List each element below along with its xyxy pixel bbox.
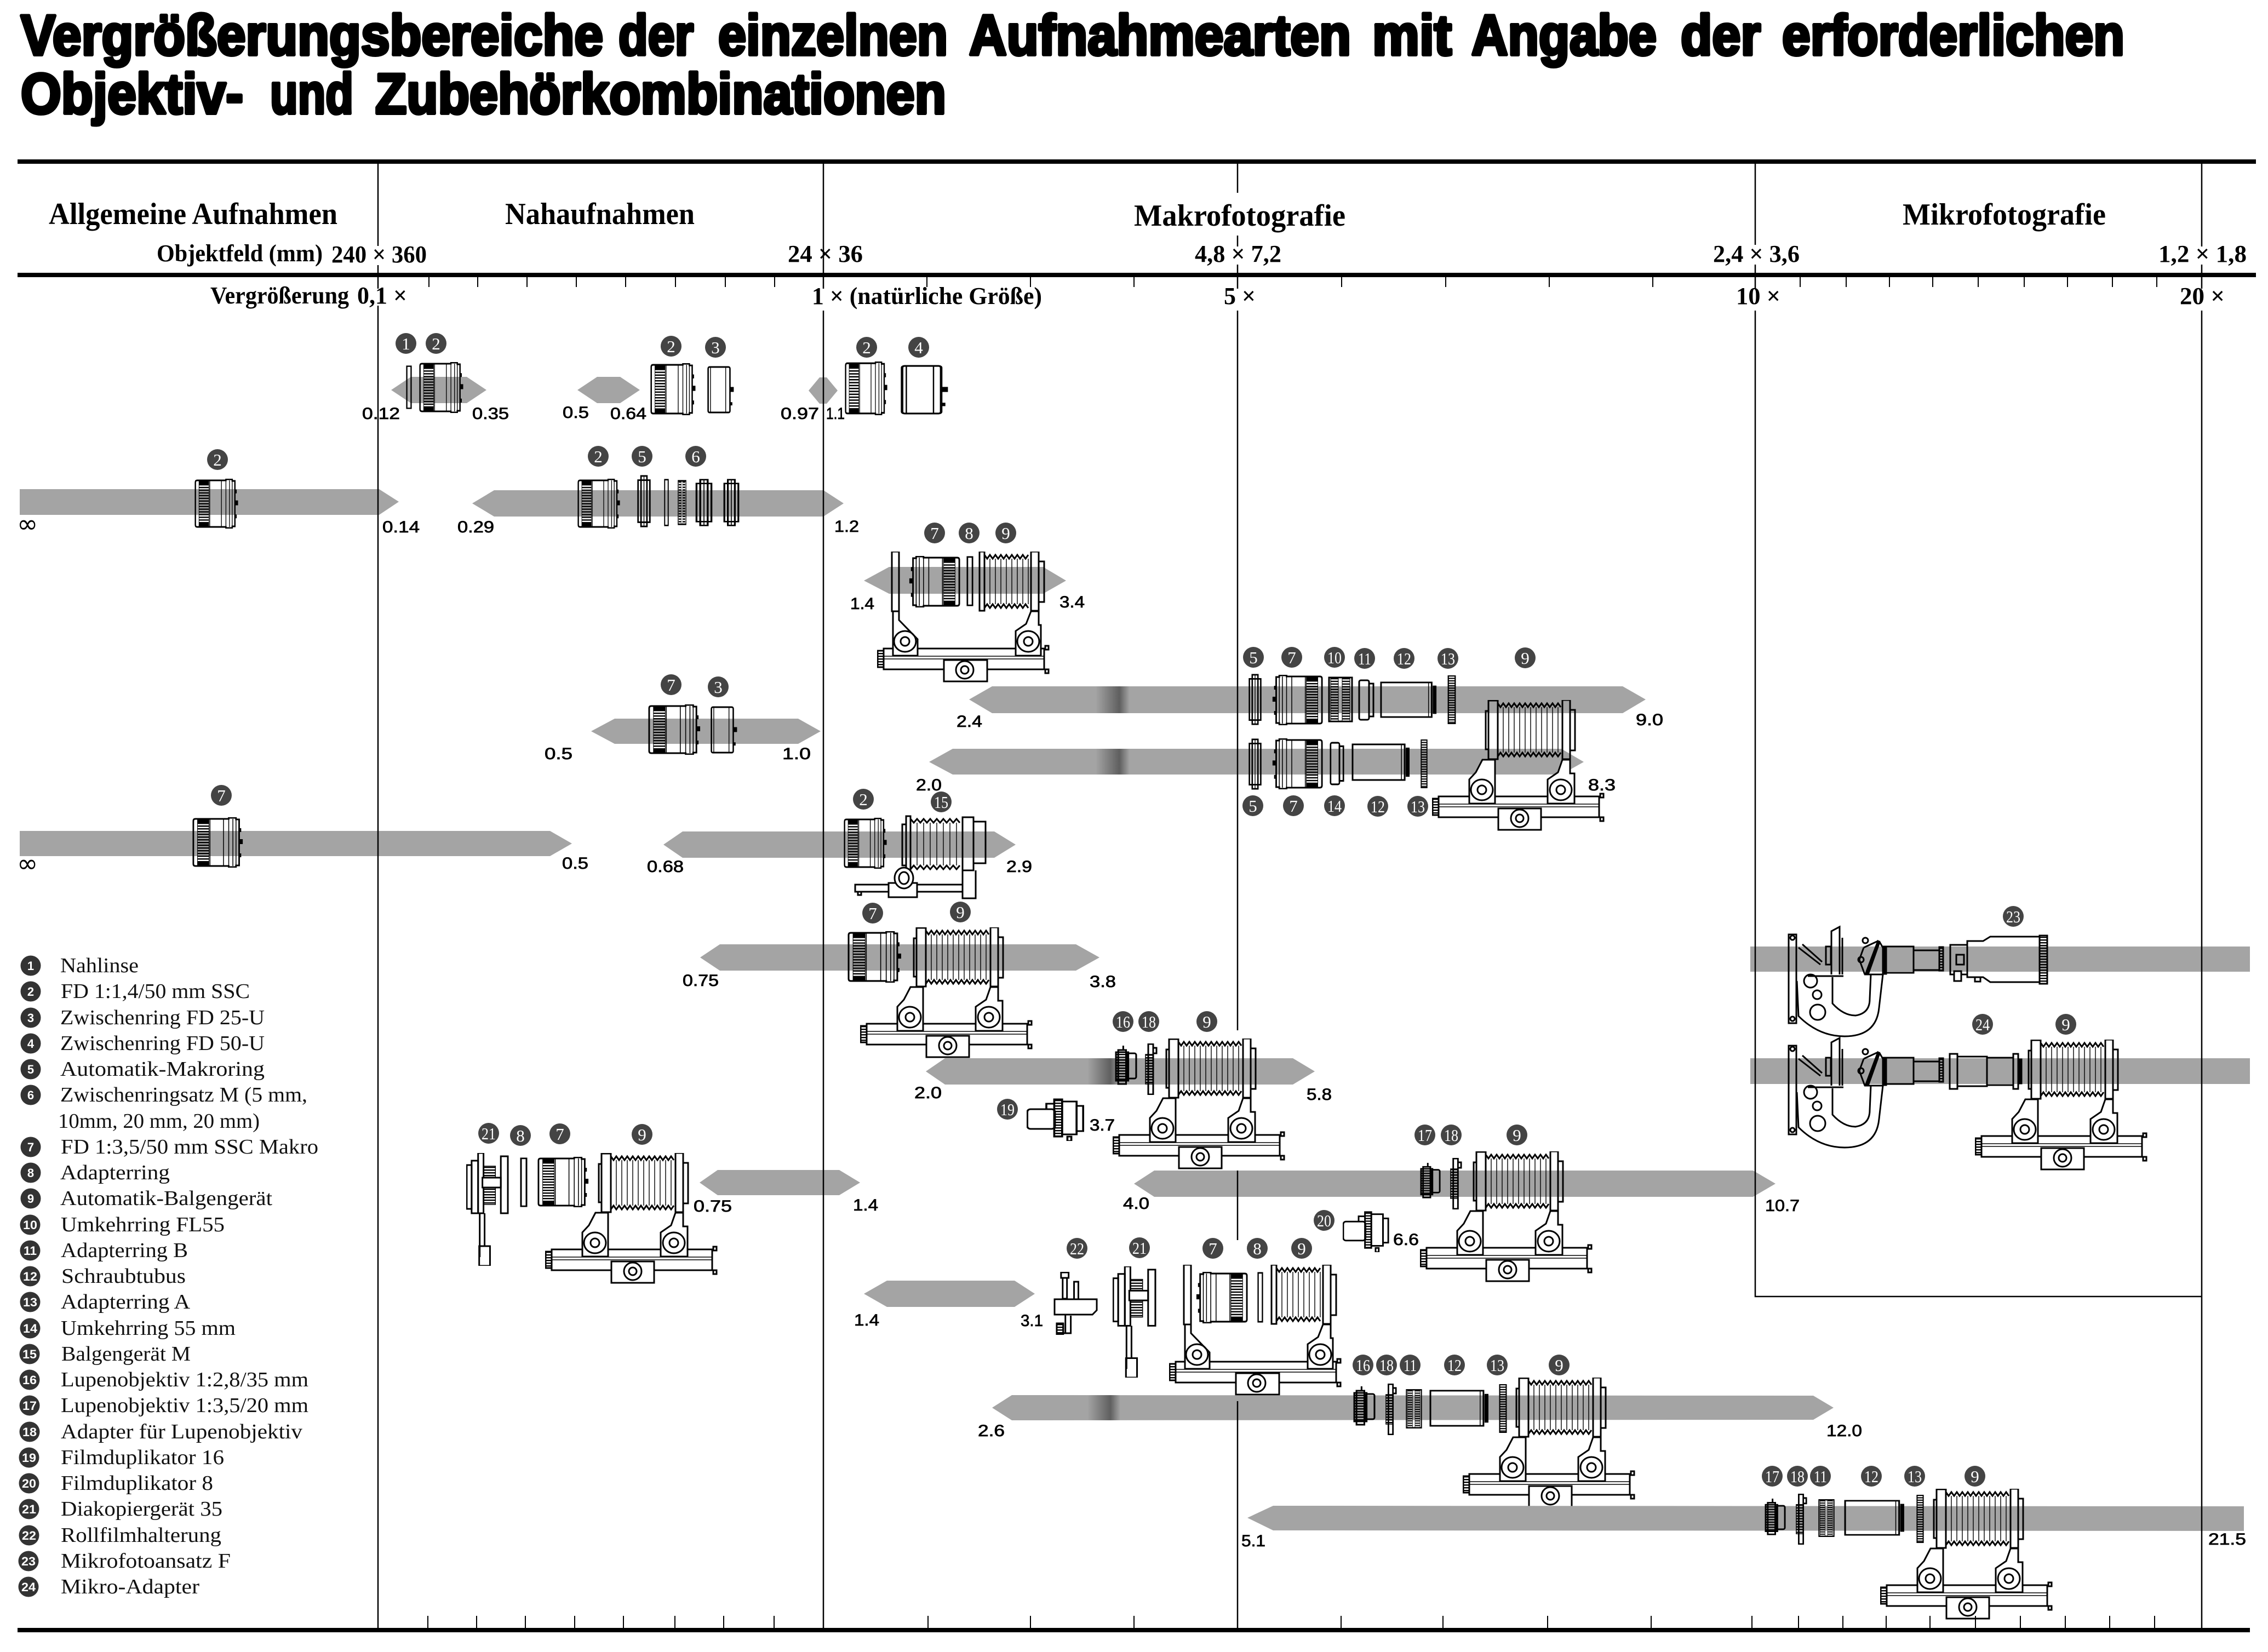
title: erforderlichen (1782, 4, 2124, 67)
range 2.6–12.0: magnifying lens, tube and bellows: 11 (1404, 1356, 1417, 1375)
range 5.1–21.5: magnifying lens, tube and bellows: 9 (1971, 1467, 1979, 1486)
range 2.0–8.3: reversed macro lens, reverse ring, tube and bellows (916, 700, 1616, 830)
range 5.1–21.5: magnifying lens, tube and bellows: 17 (1765, 1467, 1779, 1486)
legend: Lupenobjektiv 1:2,8/35 mm (61, 1368, 308, 1391)
range 0.12–0.35: close-up lens with FD 50: 0.12 (362, 405, 400, 423)
legend: FD 1:3,5/50 mm SSC Makro (61, 1135, 318, 1158)
legend: 14 (23, 1322, 38, 1335)
range 2.0–8.3: reversed macro lens, reverse ring, tube and bellows: 5 (1248, 796, 1257, 816)
range 2.0–8.3: reversed macro lens, reverse ring, tube and bellows: 2.0 (916, 776, 942, 794)
range 1.4–3.4: reversed macro lens on bellows: 3.4 (1059, 593, 1085, 611)
legend: 21 (22, 1502, 36, 1516)
legend: 20 (22, 1477, 36, 1490)
range 1.4–3.4: reversed macro lens on bellows: 9 (1001, 524, 1010, 543)
film duplicator 16: 19 (1000, 1100, 1015, 1119)
range 2.4–9.0: reversed macro lens, tube and bellows: 11 (1358, 649, 1371, 668)
legend: 5 (27, 1063, 34, 1076)
range 1.4–3.1: roll film holder, slide copier, macro lens, bellows: 1.4 (854, 1311, 879, 1329)
magnification 10x: 10 × (1736, 283, 1780, 309)
legend: 4 (27, 1037, 35, 1051)
legend: Rollfilmhalterung (61, 1524, 221, 1547)
title: der (618, 4, 694, 67)
range 4.0–10.7: magnifying lens on bellows (1123, 1125, 1800, 1281)
film duplicator 8 (1314, 1210, 1419, 1252)
range 2.0–5.8: magnifying lens on bellows: 9 (1202, 1012, 1211, 1031)
object field 4,8 x 7,2: 4,8 × 7,2 (1195, 240, 1281, 267)
range 2.4–9.0: reversed macro lens, tube and bellows: 9 (1521, 649, 1530, 668)
range 0.29–1.2: FD 50 with macro ring and extension set: 0.29 (457, 518, 494, 536)
axis header: section headings and scale labels (49, 197, 2247, 309)
microscope row with Mikro-Adapter and bellows: 9 (2061, 1015, 2070, 1034)
range 2.4–9.0: reversed macro lens, tube and bellows: 13 (1441, 649, 1455, 668)
object field 240 x 360: 240 × 360 (331, 241, 427, 268)
range 1.4–3.4: reversed macro lens on bellows: 1.4 (850, 595, 874, 613)
range infinity–0.5: macro lens (17, 785, 588, 878)
range infinity–0.14: FD 50 (17, 449, 420, 538)
range 1.4–3.1: roll film holder, slide copier, macro lens, bellows: 8 (1253, 1239, 1262, 1258)
range 2.6–12.0: magnifying lens, tube and bellows: 13 (1490, 1356, 1504, 1375)
range 0.12–0.35: close-up lens with FD 50: 1 (402, 334, 410, 353)
title: Zubehörkombinationen (375, 62, 946, 126)
range 0.97–1.1: FD 50 with extension FD 50-U: 2 (862, 338, 871, 357)
legend: 6 (27, 1088, 34, 1102)
range 2.6–12.0: magnifying lens, tube and bellows (978, 1355, 1862, 1507)
range 0.75–3.8: macro lens on bellows: 0.75 (683, 972, 719, 990)
legend: FD 1:1,4/50 mm SSC (61, 980, 250, 1003)
heading: Nahaufnahmen: Nahaufnahmen (505, 197, 695, 231)
range infinity–0.14: FD 50: 0.14 (382, 518, 420, 536)
range 1.4–3.4: reversed macro lens on bellows (850, 523, 1085, 681)
range 2.4–9.0: reversed macro lens, tube and bellows: 9.0 (1636, 711, 1663, 729)
label: Vergrößerung: Vergrößerung (210, 282, 349, 309)
legend: Filmduplikator 8 (61, 1472, 213, 1495)
range 0.75–1.4: slide copier, macro lens, bellows: 9 (638, 1125, 646, 1144)
range 0.75–1.4: slide copier, macro lens, bellows: 7 (555, 1125, 564, 1144)
range 0.68–2.9: FD 50 on bellows M (647, 789, 1032, 898)
microscope row with Mikro-Adapter and bellows (1750, 1014, 2250, 1169)
legend: Adapter für Lupenobjektiv (61, 1420, 302, 1443)
range 1.4–3.1: roll film holder, slide copier, macro lens, bellows: 3.1 (1021, 1312, 1043, 1330)
label: Objektfeld: Objektfeld (mm) (157, 240, 323, 267)
heading: Allgemeine Aufnahmen: Allgemeine Aufnahmen (49, 197, 337, 231)
legend: 19 (22, 1451, 36, 1465)
range 5.1–21.5: magnifying lens, tube and bellows (1241, 1466, 2246, 1619)
range 2.0–8.3: reversed macro lens, reverse ring, tube and bellows: 8.3 (1588, 776, 1616, 794)
object field 1,2 x 1,8: 1,2 × 1,8 (2158, 240, 2247, 267)
range 2.4–9.0: reversed macro lens, tube and bellows: 7 (1287, 648, 1296, 667)
range 0.97–1.1: FD 50 with extension FD 50-U (781, 337, 948, 423)
legend: Automatik-Makroring (60, 1058, 265, 1081)
range 2.0–8.3: reversed macro lens, reverse ring, tube and bellows: 14 (1327, 796, 1342, 816)
film duplicator 8: 6.6 (1393, 1231, 1419, 1249)
range 2.6–12.0: magnifying lens, tube and bellows: 16 (1356, 1356, 1370, 1375)
microscope row with Mikro-Adapter and bellows: 24 (1975, 1015, 1990, 1034)
range 2.6–12.0: magnifying lens, tube and bellows: 9 (1555, 1356, 1563, 1375)
legend (19, 954, 318, 1598)
range 0.29–1.2: FD 50 with macro ring and extension set: 1.2 (834, 518, 859, 536)
range infinity–0.5: macro lens: ∞ (17, 848, 38, 878)
range 2.0–5.8: magnifying lens on bellows: 2.0 (914, 1084, 942, 1102)
microscope row with Mikrofotoansatz F: 23 (2006, 907, 2020, 926)
legend: Nahlinse (60, 954, 139, 977)
legend: 8 (27, 1166, 34, 1180)
legend: 12 (23, 1270, 37, 1283)
range 4.0–10.7: magnifying lens on bellows: 18 (1444, 1126, 1458, 1145)
range 1.4–3.1: roll film holder, slide copier, macro lens, bellows: 21 (1132, 1238, 1147, 1258)
legend: 16 (22, 1373, 37, 1387)
range 0.75–3.8: macro lens on bellows: 7 (868, 904, 877, 923)
range 0.75–1.4: slide copier, macro lens, bellows (467, 1123, 878, 1283)
range 0.75–1.4: slide copier, macro lens, bellows: 0.75 (694, 1197, 732, 1215)
range 0.75–3.8: macro lens on bellows (683, 902, 1116, 1057)
legend: 11 (24, 1244, 37, 1258)
range 0.97–1.1: FD 50 with extension FD 50-U: 1.1 (826, 405, 845, 423)
legend: 10mm, 20 mm, 20 mm) (58, 1110, 260, 1133)
film duplicator 8: 20 (1317, 1211, 1331, 1230)
range 5.1–21.5: magnifying lens, tube and bellows: 13 (1908, 1467, 1922, 1486)
title: und (270, 62, 353, 126)
legend: 2 (27, 985, 34, 999)
range 2.0–5.8: magnifying lens on bellows: 5.8 (1307, 1086, 1332, 1104)
title: Aufnahmearten (969, 4, 1351, 67)
range 2.4–9.0: reversed macro lens, tube and bellows: 10 (1327, 648, 1342, 667)
range 2.0–5.8: magnifying lens on bellows (914, 1011, 1332, 1168)
range 0.5–0.64: FD 50 with extension FD 25-U (563, 336, 734, 423)
range 5.1–21.5: magnifying lens, tube and bellows: 12 (1864, 1467, 1878, 1486)
range 1.4–3.1: roll film holder, slide copier, macro lens, bellows: 22 (1070, 1239, 1084, 1258)
range 0.5–0.64: FD 50 with extension FD 25-U: 0.5 (563, 404, 589, 422)
range 0.5–1.0: macro lens with extension ring: 3 (714, 678, 723, 697)
range 0.5–0.64: FD 50 with extension FD 25-U: 2 (667, 337, 675, 356)
range 0.5–1.0: macro lens with extension ring: 7 (667, 675, 675, 695)
range 0.75–1.4: slide copier, macro lens, bellows: 8 (516, 1126, 525, 1145)
range 5.1–21.5: magnifying lens, tube and bellows: 21.5 (2208, 1530, 2246, 1548)
legend: 18 (22, 1425, 37, 1439)
range 0.75–1.4: slide copier, macro lens, bellows: 1.4 (853, 1196, 878, 1214)
legend: Adapterring B (61, 1239, 188, 1262)
range 5.1–21.5: magnifying lens, tube and bellows: 18 (1790, 1467, 1805, 1486)
legend: Zwischenring FD 50-U (60, 1032, 265, 1055)
range 2.4–9.0: reversed macro lens, tube and bellows: 5 (1249, 648, 1258, 667)
range 1.4–3.4: reversed macro lens on bellows: 7 (930, 524, 939, 543)
legend: Zwischenringsatz M (5 mm, (60, 1083, 307, 1106)
range 0.12–0.35: close-up lens with FD 50: 2 (432, 334, 440, 353)
legend: 9 (27, 1192, 34, 1206)
microscope row with Mikrofotoansatz F (1750, 906, 2250, 1036)
range 0.5–0.64: FD 50 with extension FD 25-U: 0.64 (610, 405, 646, 423)
range 0.68–2.9: FD 50 on bellows M: 2 (859, 790, 868, 809)
range 0.75–3.8: macro lens on bellows: 3.8 (1090, 973, 1116, 991)
legend: Adapterring (60, 1161, 170, 1184)
magnification 5x: 5 × (1224, 283, 1256, 309)
range 2.6–12.0: magnifying lens, tube and bellows: 18 (1379, 1356, 1394, 1375)
range infinity–0.14: FD 50: 2 (213, 450, 222, 469)
legend: Zwischenring FD 25-U (60, 1006, 265, 1029)
legend: 3 (27, 1011, 34, 1025)
range 0.5–1.0: macro lens with extension ring: 0.5 (545, 745, 572, 763)
range 4.0–10.7: magnifying lens on bellows: 9 (1513, 1126, 1521, 1145)
range 0.29–1.2: FD 50 with macro ring and extension set (457, 446, 859, 536)
legend: Diakopiergerät 35 (61, 1498, 222, 1521)
legend: 1 (27, 959, 34, 973)
legend: 23 (21, 1555, 36, 1568)
range 0.75–1.4: slide copier, macro lens, bellows: 21 (482, 1124, 496, 1143)
range 2.6–12.0: magnifying lens, tube and bellows: 12.0 (1826, 1422, 1862, 1440)
range 4.0–10.7: magnifying lens on bellows: 17 (1418, 1126, 1432, 1145)
range 1.4–3.1: roll film holder, slide copier, macro lens, bellows: 9 (1297, 1239, 1306, 1258)
range 2.0–5.8: magnifying lens on bellows: 16 (1116, 1012, 1130, 1031)
range infinity–0.5: macro lens: 7 (217, 786, 226, 805)
range 1.4–3.1: roll film holder, slide copier, macro lens, bellows (854, 1237, 1341, 1395)
legend: 10 (23, 1218, 37, 1232)
range 0.68–2.9: FD 50 on bellows M: 15 (934, 793, 948, 812)
range infinity–0.5: macro lens: 0.5 (562, 854, 588, 873)
legend: 15 (22, 1347, 37, 1361)
range 0.5–1.0: macro lens with extension ring (545, 674, 821, 763)
range 0.29–1.2: FD 50 with macro ring and extension set: 5 (638, 447, 646, 466)
object field 2,4 x 3,6: 2,4 × 3,6 (1713, 240, 1800, 267)
legend: Schraubtubus (61, 1265, 186, 1288)
heading: Makrofotografie: Makrofotografie (1134, 199, 1345, 233)
legend: Filmduplikator 16 (61, 1446, 224, 1469)
range 2.0–8.3: reversed macro lens, reverse ring, tube and bellows: 12 (1371, 797, 1385, 816)
range 0.29–1.2: FD 50 with macro ring and extension set: 2 (594, 447, 603, 466)
range 0.97–1.1: FD 50 with extension FD 50-U: 4 (914, 338, 923, 357)
legend: 13 (23, 1295, 37, 1309)
range 2.6–12.0: magnifying lens, tube and bellows: 12 (1447, 1356, 1462, 1375)
range 0.12–0.35: close-up lens with FD 50 (362, 333, 509, 423)
range 5.1–21.5: magnifying lens, tube and bellows: 5.1 (1241, 1532, 1265, 1550)
title: einzelnen (718, 4, 948, 67)
range 2.6–12.0: magnifying lens, tube and bellows: 2.6 (978, 1422, 1005, 1440)
legend: 22 (22, 1529, 36, 1542)
range 2.4–9.0: reversed macro lens, tube and bellows: 12 (1397, 649, 1411, 668)
title: der (1681, 4, 1761, 67)
range 0.29–1.2: FD 50 with macro ring and extension set: 6 (691, 447, 700, 466)
film duplicator 16: 3.7 (1090, 1116, 1115, 1134)
magnification 1x: 1 × (natürliche Größe) (812, 283, 1042, 309)
title (21, 4, 2124, 126)
heading: Mikrofotografie: Mikrofotografie (1903, 198, 2106, 232)
range 4.0–10.7: magnifying lens on bellows: 10.7 (1765, 1197, 1800, 1215)
range 5.1–21.5: magnifying lens, tube and bellows: 11 (1814, 1467, 1827, 1486)
range infinity–0.14: FD 50: ∞ (17, 509, 38, 538)
title: Angabe (1471, 4, 1657, 67)
legend: 17 (22, 1399, 37, 1413)
legend: Lupenobjektiv 1:3,5/20 mm (61, 1394, 308, 1417)
range 1.4–3.4: reversed macro lens on bellows: 8 (965, 524, 973, 543)
legend: Umkehrring 55 mm (61, 1317, 236, 1340)
range 2.4–9.0: reversed macro lens, tube and bellows (957, 647, 1663, 731)
legend: Automatik-Balgengerät (60, 1187, 272, 1210)
range 2.0–8.3: reversed macro lens, reverse ring, tube and bellows: 7 (1289, 796, 1298, 816)
range 0.97–1.1: FD 50 with extension FD 50-U: 0.97 (781, 405, 819, 423)
range 2.4–9.0: reversed macro lens, tube and bellows: 2.4 (957, 713, 982, 731)
title: Vergrößerungsbereiche (21, 4, 603, 67)
title: mit (1372, 4, 1452, 67)
range 2.0–8.3: reversed macro lens, reverse ring, tube and bellows: 13 (1411, 797, 1425, 816)
range 0.68–2.9: FD 50 on bellows M: 2.9 (1006, 858, 1032, 876)
film duplicator 16 (997, 1099, 1115, 1141)
title: Objektiv- (21, 62, 243, 126)
range 2.0–5.8: magnifying lens on bellows: 18 (1142, 1012, 1156, 1031)
legend: Umkehrring FL55 (61, 1213, 225, 1236)
legend: Adapterring A (61, 1290, 191, 1313)
legend: Mikrofotoansatz F (61, 1550, 231, 1573)
range 0.5–0.64: FD 50 with extension FD 25-U: 3 (711, 338, 720, 357)
magnification 0,1x: 0,1 × (357, 282, 407, 309)
range 1.4–3.1: roll film holder, slide copier, macro lens, bellows: 7 (1209, 1239, 1217, 1258)
legend: Mikro-Adapter (61, 1575, 199, 1598)
range 0.5–1.0: macro lens with extension ring: 1.0 (782, 745, 811, 763)
range 0.68–2.9: FD 50 on bellows M: 0.68 (647, 858, 684, 876)
range 4.0–10.7: magnifying lens on bellows: 4.0 (1123, 1195, 1149, 1213)
legend: 24 (21, 1580, 36, 1594)
object field 24 x 36: 24 × 36 (788, 240, 863, 267)
legend: Balgengerät M (61, 1343, 191, 1366)
magnification 20x: 20 × (2180, 283, 2225, 309)
legend: 7 (27, 1140, 34, 1154)
range 0.12–0.35: close-up lens with FD 50: 0.35 (472, 405, 509, 423)
range 0.75–3.8: macro lens on bellows: 9 (956, 903, 965, 922)
